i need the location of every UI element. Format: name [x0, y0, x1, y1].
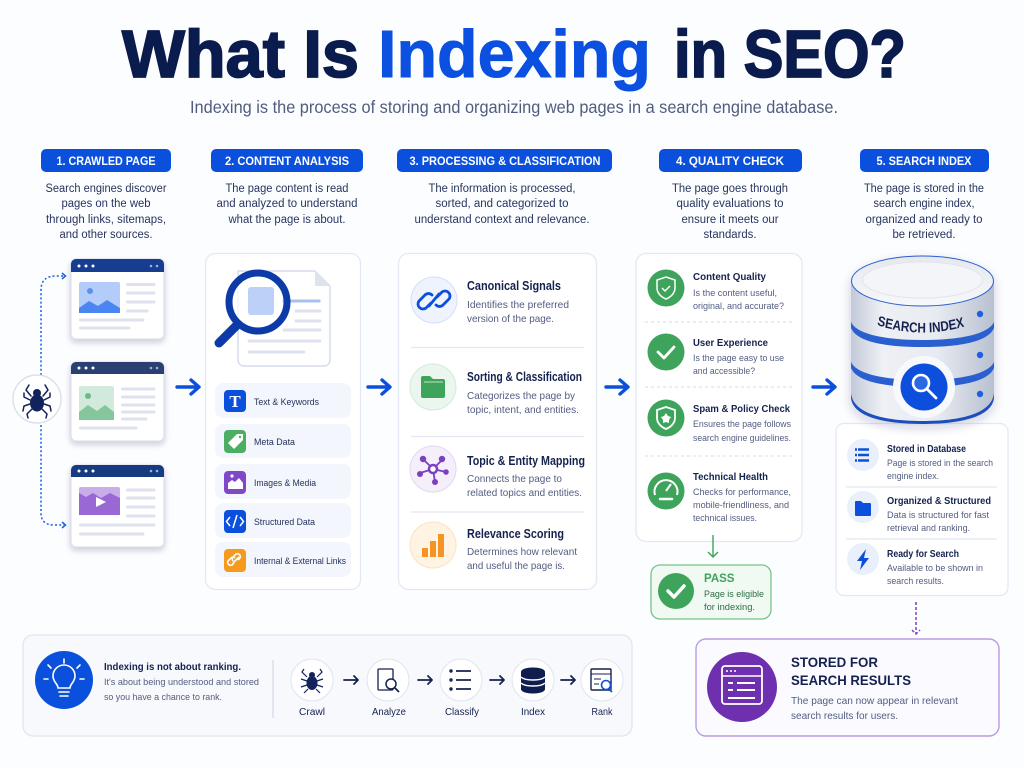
- item: spam and policy check: Ensures the page follows: [693, 418, 791, 429]
- step 4 description: quality evaluations to: [676, 198, 784, 210]
- item: ready for search: search results.: [887, 575, 944, 586]
- step 4 description: ensure it meets our: [682, 214, 779, 226]
- callout: stored for search results: The page can now appear in relevant: [791, 695, 958, 707]
- item: stored in database: Stored in Database: [887, 443, 966, 455]
- title: in SEO?: [674, 17, 906, 92]
- step 1 description: Search engines discover: [46, 183, 167, 195]
- row: text and keywords: T: [229, 392, 241, 411]
- pipeline: index: Index: [521, 706, 546, 718]
- callout: stored for search results: SEARCH RESULTS: [791, 672, 911, 688]
- document under magnifier: [238, 271, 330, 366]
- panel: quality check: [636, 254, 802, 542]
- icon: spider: [13, 375, 61, 423]
- item: topic and entity mapping: Topic & Entity Mapping: [467, 454, 585, 468]
- step 4 heading: [659, 149, 802, 172]
- step 4 heading: 4. QUALITY CHECK: [676, 154, 784, 168]
- callout: stored for search results: [696, 639, 999, 736]
- web page card: landscape: [71, 362, 164, 441]
- step 5 heading: [860, 149, 989, 172]
- crawler connector arrows: [41, 273, 66, 528]
- panel: processing and classification: [398, 254, 596, 590]
- callout: pass: PASS: [704, 573, 735, 585]
- item: user experience: Is the page easy to use: [693, 352, 784, 363]
- step 2 description: what the page is about.: [228, 214, 346, 226]
- row: meta data: Meta Data: [254, 436, 296, 447]
- row: structured data: Structured Data: [254, 516, 316, 527]
- step 4 description: standards.: [704, 229, 756, 241]
- row: images and media: Images & Media: [254, 477, 317, 488]
- arrow: step 1 to 2: [177, 380, 199, 394]
- arrow: [490, 676, 504, 684]
- arrow: [418, 676, 432, 684]
- arrow: [344, 676, 358, 684]
- pipeline: rank: Rank: [592, 706, 613, 718]
- arrow: step 4 to 5: [813, 380, 835, 394]
- item: organized and structured: Organized & Structured: [887, 495, 991, 507]
- arrow: [561, 676, 575, 684]
- step 3 description: The information is processed,: [428, 183, 576, 195]
- step 1 description: and other sources.: [60, 229, 152, 241]
- item: sorting and classification: topic, intent, and entities.: [467, 404, 579, 416]
- takeaway text: It's about being understood and stored: [104, 677, 259, 688]
- item: canonical signals: Identifies the preferred: [467, 299, 569, 311]
- database: search index: SEARCH INDEX: [878, 316, 964, 333]
- step 5 description: The page is stored in the: [864, 183, 984, 195]
- item: ready for search: [847, 543, 983, 586]
- callout: pass: [651, 565, 771, 619]
- item: user experience: User Experience: [693, 337, 768, 349]
- item: sorting and classification: Sorting & Classification: [467, 370, 582, 384]
- step 4 description: The page goes through: [672, 183, 788, 195]
- item: spam and policy check: [648, 400, 791, 443]
- web page card: video: [71, 465, 164, 547]
- arrow: index to results: [912, 602, 920, 634]
- step 4 description: [672, 183, 788, 241]
- item: technical health: [648, 471, 791, 523]
- item: topic and entity mapping: related topics and entities.: [467, 487, 582, 499]
- title: [122, 17, 906, 92]
- icon: results page: [707, 652, 777, 722]
- item: relevance scoring: Determines how relevant: [467, 546, 577, 558]
- row: images and media: [215, 464, 351, 499]
- callout: stored for search results: STORED FOR: [791, 654, 878, 670]
- step 2 description: [216, 183, 358, 226]
- item: content quality: [648, 270, 784, 311]
- title: Indexing: [378, 17, 651, 92]
- callout: stored for search results: search results for users.: [791, 710, 898, 722]
- item: organized and structured: [847, 491, 991, 533]
- item: technical health: technical issues.: [693, 512, 757, 523]
- icon: magnifier: [219, 273, 287, 343]
- web page card: image: [71, 259, 164, 339]
- title: What Is: [122, 17, 359, 92]
- row: internal and external links: [215, 542, 351, 577]
- takeaway text: [104, 661, 259, 703]
- item: canonical signals: Canonical Signals: [467, 279, 561, 293]
- arrow: quality check to pass: [708, 535, 718, 557]
- step 5 heading: 5. SEARCH INDEX: [876, 154, 972, 168]
- subtitle: Indexing is the process of storing and organizing web pages in a search engine database.: [190, 97, 838, 117]
- item: user experience: and accessible?: [693, 365, 755, 376]
- step 1 description: pages on the web: [62, 198, 150, 210]
- pipeline: analyze: Analyze: [372, 706, 406, 718]
- arrow: step 2 to 3: [368, 380, 390, 394]
- pipeline: index: [512, 659, 554, 718]
- item: stored in database: Page is stored in the search: [887, 457, 993, 468]
- panel: takeaway and pipeline: [23, 635, 632, 736]
- pipeline: crawl: Crawl: [299, 706, 325, 718]
- step 1 description: through links, sitemaps,: [46, 214, 166, 226]
- step 1 heading: [41, 149, 171, 172]
- icon: light bulb: [35, 651, 93, 709]
- item: technical health: mobile-friendliness, and: [693, 499, 789, 510]
- panel: search index details: [836, 424, 1008, 596]
- step 3 heading: 3. PROCESSING & CLASSIFICATION: [410, 154, 600, 168]
- step 1 heading: 1. CRAWLED PAGE: [56, 154, 156, 168]
- item: content quality: original, and accurate?: [693, 300, 784, 311]
- step 5 description: organized and ready to: [866, 214, 982, 226]
- item: topic and entity mapping: [410, 446, 585, 499]
- step 3 description: sorted, and categorized to: [436, 198, 568, 210]
- item: content quality: Content Quality: [693, 271, 766, 283]
- pipeline: classify: [440, 659, 482, 718]
- step 1 description: [46, 183, 167, 241]
- row: text and keywords: [215, 383, 351, 418]
- item: topic and entity mapping: Connects the page to: [467, 473, 562, 485]
- callout: pass: Page is eligible: [704, 588, 764, 599]
- step 2 description: The page content is read: [226, 183, 348, 195]
- item: relevance scoring: [410, 522, 577, 572]
- step 5 description: be retrieved.: [892, 229, 956, 241]
- step 2 heading: [211, 149, 363, 172]
- item: spam and policy check: Spam & Policy Check: [693, 403, 790, 415]
- step 5 description: [864, 183, 984, 241]
- row: structured data: [215, 503, 351, 538]
- item: technical health: Technical Health: [693, 471, 768, 483]
- callout: pass: for indexing.: [704, 601, 755, 612]
- pipeline: crawl: [291, 659, 333, 718]
- item: sorting and classification: [410, 364, 582, 416]
- item: technical health: Checks for performance,: [693, 486, 791, 497]
- takeaway text: so you have a chance to rank.: [104, 692, 222, 703]
- step 3 description: [414, 183, 590, 226]
- step 5 description: search engine index,: [874, 198, 974, 210]
- item: stored in database: [847, 439, 993, 481]
- step 3 description: understand context and relevance.: [414, 214, 590, 226]
- pipeline: analyze: [367, 659, 409, 718]
- item: sorting and classification: Categorizes the page by: [467, 390, 576, 402]
- item: spam and policy check: search engine guidelines.: [693, 432, 791, 443]
- step 2 description: and analyzed to understand: [216, 198, 358, 210]
- item: user experience: [648, 334, 784, 376]
- item: organized and structured: retrieval and ranking.: [887, 522, 970, 533]
- item: stored in database: engine index.: [887, 470, 939, 481]
- pipeline: rank: [581, 659, 623, 718]
- row: internal and external links: Internal & External Links: [254, 555, 346, 566]
- item: content quality: Is the content useful,: [693, 287, 777, 298]
- pipeline: classify: Classify: [445, 706, 480, 718]
- item: ready for search: Ready for Search: [887, 548, 959, 560]
- step 3 heading: [397, 149, 612, 172]
- row: meta data: [215, 424, 351, 458]
- item: ready for search: Available to be shown in: [887, 562, 983, 573]
- arrow: step 3 to 4: [606, 380, 628, 394]
- database: search index: [846, 255, 998, 432]
- step 2 heading: 2. CONTENT ANALYSIS: [225, 154, 349, 168]
- row: text and keywords: Text & Keywords: [254, 396, 319, 407]
- item: organized and structured: Data is structured for fast: [887, 509, 989, 520]
- item: canonical signals: [411, 277, 569, 325]
- item: canonical signals: version of the page.: [467, 313, 554, 325]
- item: relevance scoring: Relevance Scoring: [467, 527, 564, 541]
- takeaway text: Indexing is not about ranking.: [104, 661, 241, 673]
- item: relevance scoring: and useful the page is.: [467, 560, 565, 572]
- panel: content analysis: [206, 254, 360, 590]
